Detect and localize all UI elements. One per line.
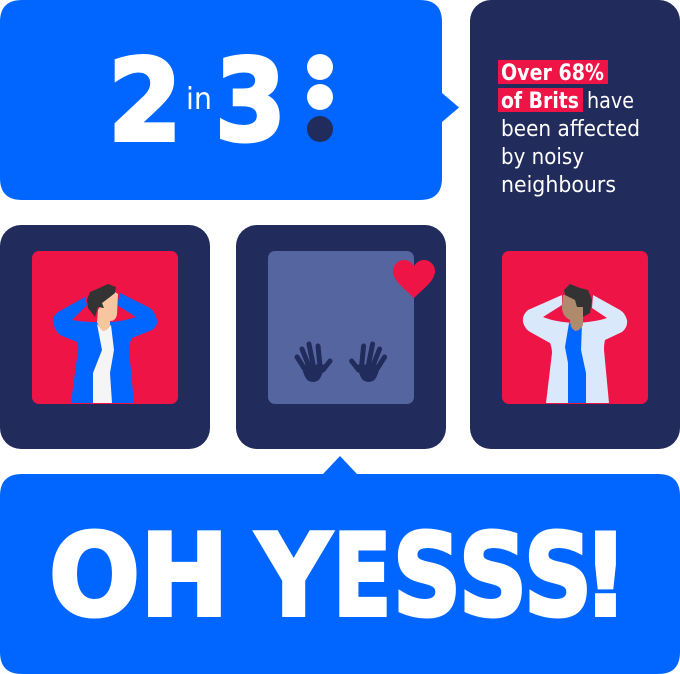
heading: 2 in 3: in <box>186 82 212 117</box>
text block: over 68 percent of Brits: neighbours <box>501 173 616 198</box>
heading: OH YESSS!: S <box>524 510 592 642</box>
panel: OH YESSS speech bubble <box>0 456 680 674</box>
panel: middle illustration card <box>236 225 446 449</box>
text block: over 68 percent of Brits: have <box>587 89 634 114</box>
text block: over 68 percent of Brits: by noisy <box>501 145 584 170</box>
heading: 2 in 3 <box>108 35 286 167</box>
text block: over 68 percent of Brits: Over 68% <box>501 61 604 86</box>
heading: 2 in 3: 2 <box>108 35 182 167</box>
text block: over 68 percent of Brits: been affected <box>501 117 640 142</box>
text block: over 68 percent of Brits <box>498 60 640 198</box>
heading: OH YESSS!: Y <box>255 510 332 642</box>
text block: over 68 percent of Brits: of Brits <box>501 89 579 114</box>
panel: left illustration card <box>0 225 210 449</box>
heading: OH YESSS!: ! <box>583 510 628 642</box>
illustration: man in blue jacket, hands on head <box>32 251 178 404</box>
icon: three dots <box>307 54 333 142</box>
heading: OH YESSS!: O <box>49 510 140 642</box>
panel: 2 in 3 speech bubble <box>0 0 459 200</box>
panel: right statistic <box>470 0 680 449</box>
window square <box>268 251 414 404</box>
icon: left hand <box>297 344 330 382</box>
heading: OH YESSS!: S <box>459 510 527 642</box>
heading: 2 in 3: 3 <box>215 35 286 167</box>
icon: heart <box>393 260 435 298</box>
heading: OH YESSS!: E <box>333 510 391 642</box>
heading: OH YESSS!: S <box>393 510 461 642</box>
icon: right hand <box>352 344 385 382</box>
illustration: man with dark skin, hands on head <box>502 251 648 404</box>
heading: OH YESSS!: H <box>140 510 229 642</box>
